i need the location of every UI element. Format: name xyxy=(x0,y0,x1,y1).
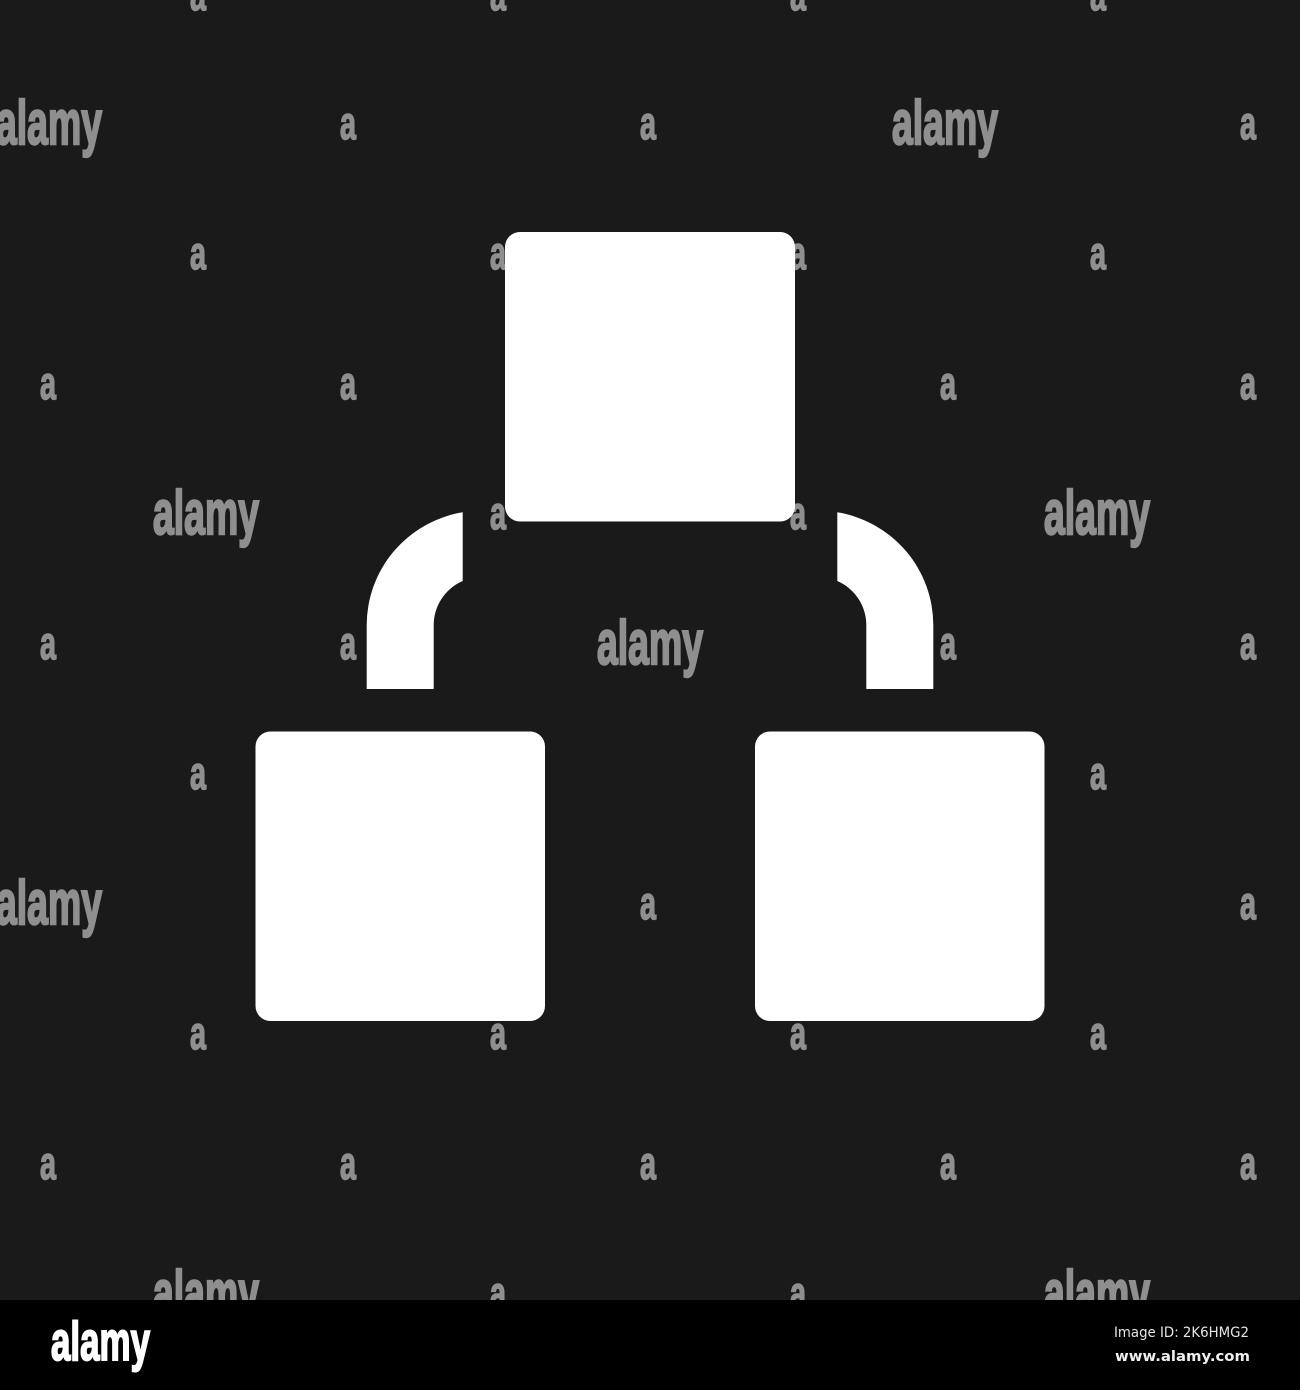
watermark pattern: a xyxy=(1090,747,1106,799)
watermark pattern: a xyxy=(40,357,56,409)
watermark pattern: a xyxy=(1240,97,1256,149)
top node square xyxy=(505,232,795,522)
watermark pattern: a xyxy=(40,1137,56,1189)
watermark pattern: a xyxy=(640,1137,656,1189)
footer bar xyxy=(0,1300,1300,1390)
watermark pattern: alamy xyxy=(1044,1259,1150,1328)
watermark pattern: alamy xyxy=(0,89,102,158)
watermark pattern: a xyxy=(190,747,206,799)
footer logo: alamy xyxy=(51,1310,150,1372)
watermark pattern: alamy xyxy=(892,89,998,158)
right connector xyxy=(837,512,933,689)
watermark pattern: alamy xyxy=(153,1259,259,1328)
watermark pattern: a xyxy=(940,1137,956,1189)
watermark pattern: a xyxy=(790,747,806,799)
left connector xyxy=(367,512,463,689)
watermark pattern: a xyxy=(640,877,656,929)
watermark pattern: alamy xyxy=(597,609,703,678)
website: www.alamy.com xyxy=(1115,1349,1250,1365)
watermark pattern: a xyxy=(340,97,356,149)
watermark pattern: a xyxy=(490,487,506,539)
icon: hierarchy diagram xyxy=(256,232,1044,1021)
watermark pattern: a xyxy=(1240,877,1256,929)
watermark pattern: a xyxy=(790,1007,806,1059)
watermark pattern: a xyxy=(1240,617,1256,669)
watermark pattern: a xyxy=(340,1137,356,1189)
bottom right node square xyxy=(755,732,1044,1021)
watermark pattern: a xyxy=(190,1007,206,1059)
watermark pattern: a xyxy=(640,97,656,149)
watermark pattern: a xyxy=(190,227,206,279)
watermark pattern: a xyxy=(940,357,956,409)
watermark pattern: a xyxy=(790,227,806,279)
watermark pattern: a xyxy=(790,1267,806,1319)
watermark pattern: a xyxy=(490,1267,506,1319)
watermark pattern: a xyxy=(340,617,356,669)
watermark pattern: a xyxy=(340,357,356,409)
image id: Image ID: 2K6HMG2 xyxy=(1114,1325,1249,1341)
watermark pattern: a xyxy=(490,227,506,279)
watermark pattern: alamy xyxy=(153,479,259,548)
watermark pattern: a xyxy=(940,617,956,669)
watermark pattern: a xyxy=(790,487,806,539)
watermark pattern: a xyxy=(490,1007,506,1059)
watermark pattern: a xyxy=(1090,227,1106,279)
watermark pattern: a xyxy=(1240,357,1256,409)
watermark pattern: a xyxy=(1240,1137,1256,1189)
bottom left node square xyxy=(256,732,545,1021)
watermark pattern: a xyxy=(940,877,956,929)
watermark pattern: a xyxy=(1090,1007,1106,1059)
watermark pattern: alamy xyxy=(1044,479,1150,548)
watermark pattern: alamy xyxy=(0,869,102,938)
watermark pattern: a xyxy=(40,617,56,669)
watermark pattern: a xyxy=(490,747,506,799)
